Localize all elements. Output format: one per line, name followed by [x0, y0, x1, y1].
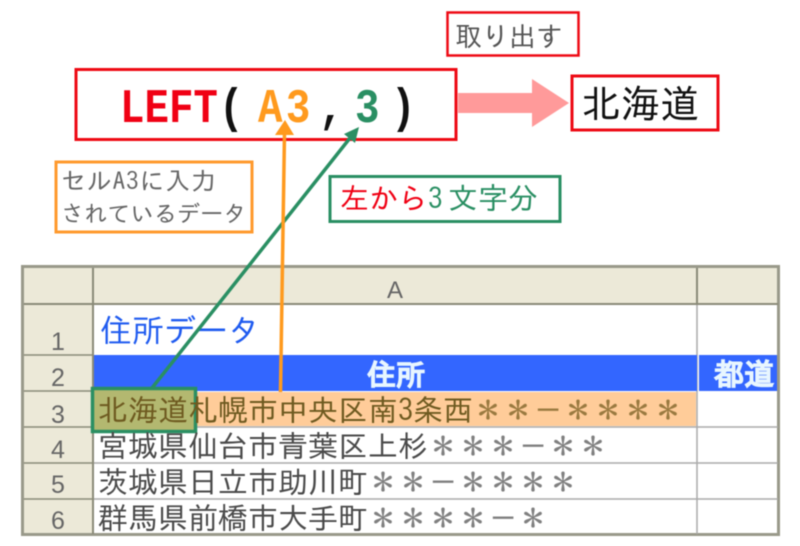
note: cell A3: セルA3に入力: [61, 169, 216, 194]
row 6 text: 群馬県前橋市大手町＊＊＊＊－＊: [98, 503, 548, 533]
selected cell highlight: [92, 388, 196, 432]
blue header cell: address: [94, 355, 697, 391]
arrow: green, cell to length argument: [152, 127, 359, 388]
result box: 北海道: [582, 84, 699, 123]
row numbers: [51, 328, 65, 535]
grid lines: [24, 268, 778, 534]
column header row: [24, 268, 777, 304]
highlighted row 3: [94, 392, 696, 426]
sheet title: 住所データ: [100, 314, 260, 346]
note: 3 characters from left: 3: [428, 184, 442, 213]
arrow: orange, row to cell reference: [275, 120, 294, 392]
header text: prefecture: 都道: [714, 359, 774, 389]
opening parenthesis: (: [219, 83, 243, 137]
note: 3 characters from left: [330, 176, 560, 222]
label: extract: 取り出す: [455, 23, 563, 50]
row 3 text: 北海道札幌市中央区南3条西＊＊－＊＊＊＊: [98, 395, 683, 425]
row numbers: 5: [51, 471, 65, 499]
blue header cell: prefecture: [699, 355, 777, 391]
comma: ,: [319, 83, 343, 137]
row numbers: 3: [51, 401, 65, 429]
argument A3: A3: [258, 83, 314, 137]
note: cell A3: されているデータ: [61, 202, 246, 225]
row 4 text: 宮城県仙台市青葉区上杉＊＊＊－＊＊: [98, 431, 608, 461]
row numbers: 2: [51, 364, 65, 392]
row header column: [24, 268, 93, 533]
formula box: [76, 70, 456, 140]
function name: LEFT: [120, 83, 218, 137]
sheet frame: [22, 266, 778, 534]
row numbers: 4: [51, 436, 65, 464]
closing parenthesis: ): [391, 83, 415, 137]
argument 3: 3: [355, 83, 379, 137]
arrow: to result: [458, 79, 569, 127]
column label A: A: [387, 277, 403, 304]
row numbers: 1: [51, 328, 65, 356]
note: 3 characters from left: 文字分: [448, 183, 538, 213]
note: 3 characters from left: 左から: [340, 184, 427, 213]
result box: [572, 76, 718, 130]
spreadsheet: [22, 266, 778, 535]
label: extract: [448, 12, 578, 56]
header text: address: 住所: [367, 360, 425, 389]
note: cell A3: [56, 162, 252, 232]
row numbers: 6: [51, 507, 65, 535]
row 5 text: 茨城県日立市助川町＊＊－＊＊＊＊: [98, 467, 578, 497]
